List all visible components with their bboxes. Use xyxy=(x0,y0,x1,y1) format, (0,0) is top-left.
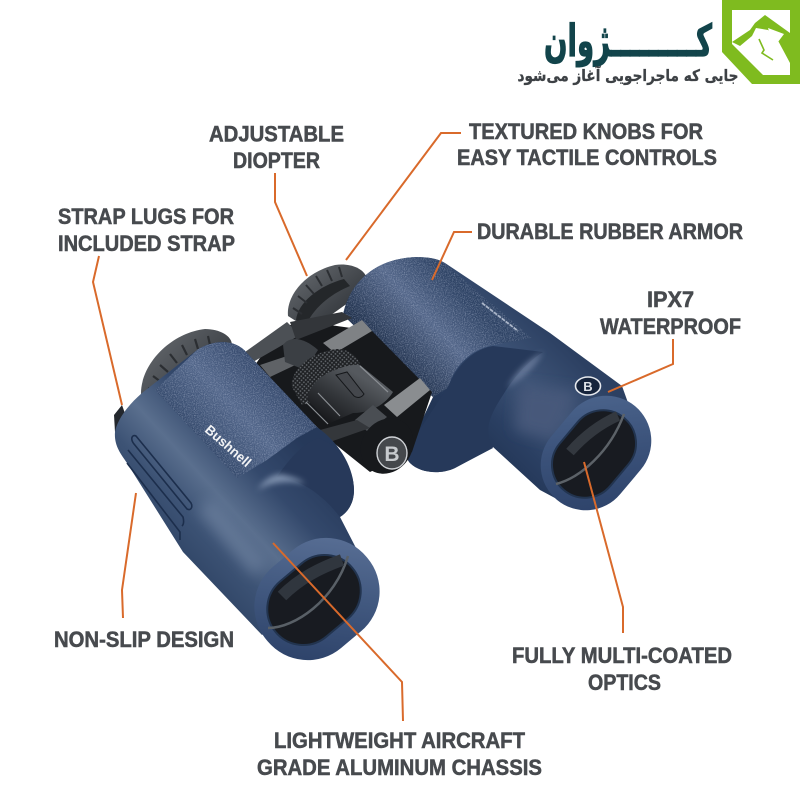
left lens xyxy=(253,540,375,660)
focus wheel rubber grip xyxy=(306,365,393,424)
callout: textured knobs: EASY TACTILE CONTROLS xyxy=(457,145,717,170)
callout: textured knobs: TEXTURED KNOBS FOR xyxy=(469,119,703,144)
callout: aluminum chassis: LIGHTWEIGHT AIRCRAFT xyxy=(274,728,525,753)
logo emblem: green mountain badge xyxy=(722,0,800,84)
strap lug xyxy=(114,405,128,432)
right objective rim xyxy=(522,377,670,529)
lower axle xyxy=(355,405,387,432)
callout: strap lugs xyxy=(58,204,235,405)
lower hinge bars xyxy=(320,378,430,442)
callout: multi-coated optics xyxy=(512,462,732,695)
callout: durable rubber armor: DURABLE RUBBER ARMOR xyxy=(477,219,743,244)
callout: strap lugs: STRAP LUGS FOR xyxy=(58,204,234,229)
focus wheel knurled xyxy=(292,349,360,405)
callout: multi-coated optics: FULLY MULTI-COATED xyxy=(512,643,732,668)
callout: multi-coated optics: OPTICS xyxy=(588,670,661,695)
hinge assembly xyxy=(245,312,432,484)
hinge cap with B badge: B xyxy=(384,443,400,466)
left textured panel xyxy=(155,342,317,478)
callout: durable rubber armor xyxy=(432,219,743,280)
callout: adjustable diopter: DIOPTER xyxy=(233,148,320,173)
right hinge housing xyxy=(407,346,543,472)
Bushnell logo: Bushnell xyxy=(202,422,254,470)
right eyepiece knob xyxy=(288,265,366,330)
callout: IPX7 waterproof xyxy=(600,287,741,392)
logo xyxy=(518,0,800,85)
upper hinge bars xyxy=(245,312,372,377)
callout: textured knobs xyxy=(346,119,717,260)
callout: IPX7 waterproof: IPX7 xyxy=(647,287,694,312)
left barrel xyxy=(114,342,401,681)
callout: non-slip design: NON-SLIP DESIGN xyxy=(54,627,234,652)
grip ribs xyxy=(127,436,192,540)
callout: adjustable diopter xyxy=(209,122,344,276)
right model lettering xyxy=(482,303,518,331)
hinge backing xyxy=(255,325,432,472)
upper axle xyxy=(283,339,318,370)
right barrel xyxy=(343,257,670,529)
right lens xyxy=(539,397,649,511)
logo tagline: جایی که ماجراجویی آغاز می‌شود xyxy=(518,65,738,85)
callout: adjustable diopter: ADJUSTABLE xyxy=(209,122,344,146)
callout: aluminum chassis xyxy=(257,543,542,780)
callout: strap lugs: INCLUDED STRAP xyxy=(58,231,235,256)
right barrel textured panel xyxy=(343,257,532,397)
hinge cap with B badge xyxy=(350,408,424,484)
binoculars xyxy=(114,257,670,681)
callout: IPX7 waterproof: WATERPROOF xyxy=(600,314,741,339)
left objective rim xyxy=(233,517,401,681)
callout: non-slip design xyxy=(54,493,234,652)
right small badge: B xyxy=(583,379,593,394)
callout: aluminum chassis: GRADE ALUMINUM CHASSIS xyxy=(257,755,542,780)
left hinge housing xyxy=(277,438,354,517)
right small badge xyxy=(576,377,600,395)
left eyepiece knob xyxy=(141,329,232,420)
